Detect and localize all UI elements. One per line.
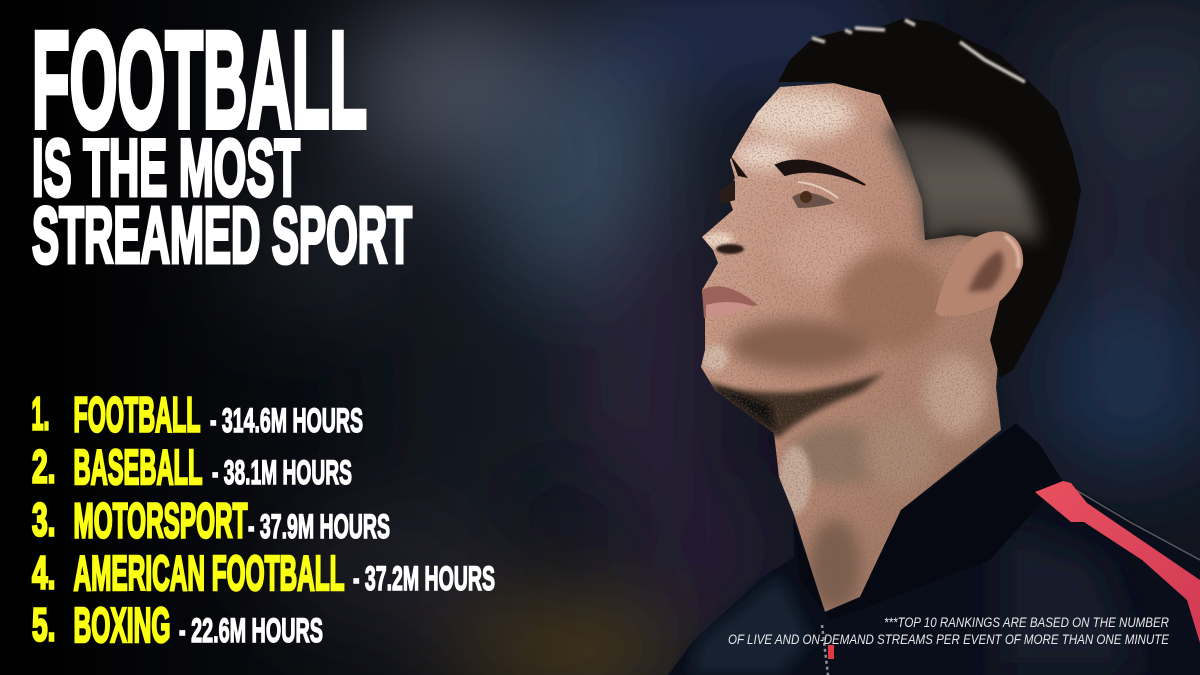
row 3: MOTORSPORT — [74, 494, 248, 548]
title: FOOTBALL — [32, 4, 367, 157]
row 4: AMERICAN FOOTBALL — [74, 547, 344, 601]
row 4: 4. — [32, 546, 56, 598]
row 5: BOXING — [74, 599, 170, 653]
row 1: FOOTBALL — [74, 388, 200, 442]
eye and brow — [718, 155, 865, 208]
row 2: - 38.1M HOURS — [212, 454, 352, 492]
row 4: - 37.2M HOURS — [353, 560, 495, 598]
row 3: - 37.9M HOURS — [248, 508, 390, 546]
row 1: - 314.6M HOURS — [210, 402, 363, 440]
row 5: - 22.6M HOURS — [179, 612, 323, 650]
row 1: 1. — [32, 388, 50, 440]
neck and face skin — [701, 83, 1001, 612]
red shoulder stripe — [1035, 481, 1200, 643]
hair — [778, 18, 1081, 378]
title line 2: IS THE MOST — [32, 124, 300, 214]
zipper — [822, 625, 834, 675]
row 2: BASEBALL — [74, 441, 202, 495]
footnote — [728, 615, 1170, 647]
row 2: 2. — [32, 440, 56, 492]
title — [32, 4, 412, 280]
photo: footballer in profile — [668, 18, 1200, 675]
row 3: 3. — [32, 494, 56, 546]
nose and lips — [702, 244, 758, 318]
title line 3: STREAMED SPORT — [32, 190, 412, 280]
row 5: 5. — [32, 598, 56, 650]
ranked list — [32, 388, 495, 653]
black jacket — [668, 423, 1200, 675]
ear — [935, 231, 1023, 316]
row 5 — [32, 598, 323, 653]
